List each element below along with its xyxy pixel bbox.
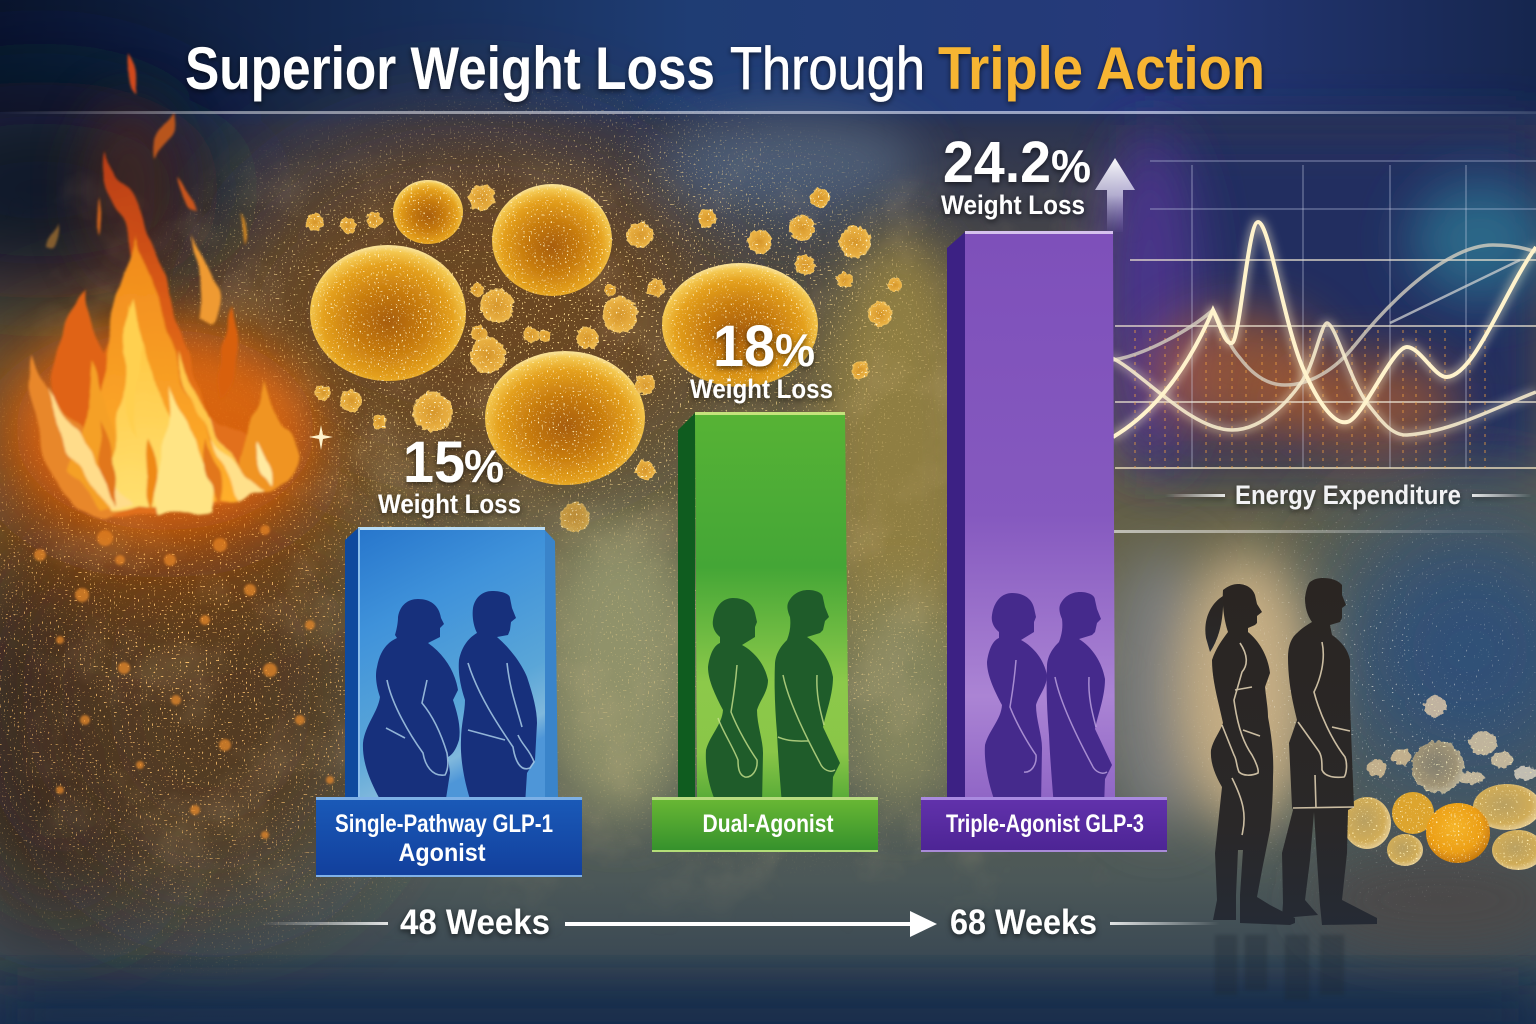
cell cluster: large bbox=[310, 180, 818, 485]
label: 48 weeks: 48 Weeks bbox=[400, 903, 550, 942]
value label: Weight Loss bbox=[378, 489, 521, 519]
title bbox=[185, 35, 1265, 102]
silhouette: woman bbox=[1205, 584, 1295, 925]
chart grid bbox=[1115, 161, 1536, 468]
arrow: timeline bbox=[565, 911, 937, 937]
rule under energy expenditure bbox=[1110, 530, 1536, 533]
base label: Agonist bbox=[398, 839, 486, 867]
chart line: straight trend bbox=[1390, 260, 1520, 323]
energy expenditure label: Energy Expenditure bbox=[1235, 480, 1461, 510]
title: Triple Action bbox=[938, 35, 1265, 102]
silhouette: man bbox=[1282, 578, 1377, 925]
inner flames bbox=[109, 305, 190, 510]
flame wisps bbox=[127, 53, 138, 95]
timeline bbox=[260, 903, 1220, 942]
bar body bbox=[345, 527, 558, 798]
title: Superior Weight Loss bbox=[185, 35, 715, 102]
value label: Weight Loss bbox=[941, 190, 1085, 220]
silhouette highlights bbox=[1222, 642, 1354, 835]
silhouette highlights bbox=[1010, 660, 1107, 773]
base label: Dual-Agonist bbox=[702, 810, 834, 838]
darker flame streaks bbox=[144, 440, 156, 510]
value label: % bbox=[775, 324, 815, 376]
chart line: secondary bbox=[1110, 323, 1536, 435]
chart glow bbox=[1150, 310, 1460, 455]
label: 68 weeks: 68 Weeks bbox=[950, 903, 1097, 942]
bar: dual-agonist bbox=[652, 314, 878, 852]
golden deposits bbox=[1343, 784, 1536, 870]
energy expenditure label bbox=[1165, 480, 1532, 510]
silhouettes: after treatment bbox=[1205, 578, 1377, 925]
sparkle bbox=[309, 425, 333, 450]
title: Through bbox=[730, 35, 925, 102]
chart line: upper trend bbox=[1113, 245, 1536, 385]
value label bbox=[690, 314, 833, 404]
value label: 15 bbox=[403, 430, 465, 495]
value label: 24.2 bbox=[943, 130, 1051, 195]
title rule bbox=[0, 111, 1536, 114]
base label bbox=[652, 797, 878, 852]
silhouette highlights bbox=[386, 663, 534, 775]
middle flames bbox=[95, 235, 240, 508]
value label bbox=[378, 430, 521, 519]
value label bbox=[941, 130, 1091, 220]
silhouette reflections bbox=[1215, 935, 1344, 1000]
icon: fire bbox=[15, 53, 315, 530]
outer flames bbox=[40, 408, 290, 516]
value label: 18 bbox=[713, 314, 775, 379]
base label: Triple-Agonist GLP-3 bbox=[946, 810, 1144, 838]
ember clusters bbox=[34, 525, 334, 839]
bar body bbox=[947, 231, 1115, 798]
value label: % bbox=[1051, 140, 1091, 192]
silhouettes: before bbox=[363, 591, 537, 805]
cell cluster: small bbox=[306, 185, 902, 532]
bar body bbox=[678, 412, 849, 798]
base label bbox=[921, 797, 1167, 852]
bar: triple-agonist GLP-3 bbox=[921, 130, 1167, 852]
pale deposits bbox=[1367, 695, 1536, 793]
energy expenditure chart bbox=[1110, 161, 1536, 468]
chart line: peaks bbox=[1113, 222, 1536, 437]
base label: Single-Pathway GLP-1 bbox=[335, 810, 553, 838]
fat cells bbox=[306, 180, 902, 532]
silhouettes: after bbox=[985, 592, 1112, 807]
silhouettes: mid bbox=[706, 590, 840, 805]
value label: Weight Loss bbox=[690, 374, 833, 404]
arrow: upward bbox=[1095, 158, 1135, 232]
gold deposits lower right bbox=[1343, 695, 1536, 870]
bar: single-pathway GLP-1 bbox=[316, 430, 582, 877]
silhouette highlights bbox=[718, 665, 835, 777]
value label: % bbox=[464, 440, 504, 492]
base label bbox=[316, 797, 582, 877]
